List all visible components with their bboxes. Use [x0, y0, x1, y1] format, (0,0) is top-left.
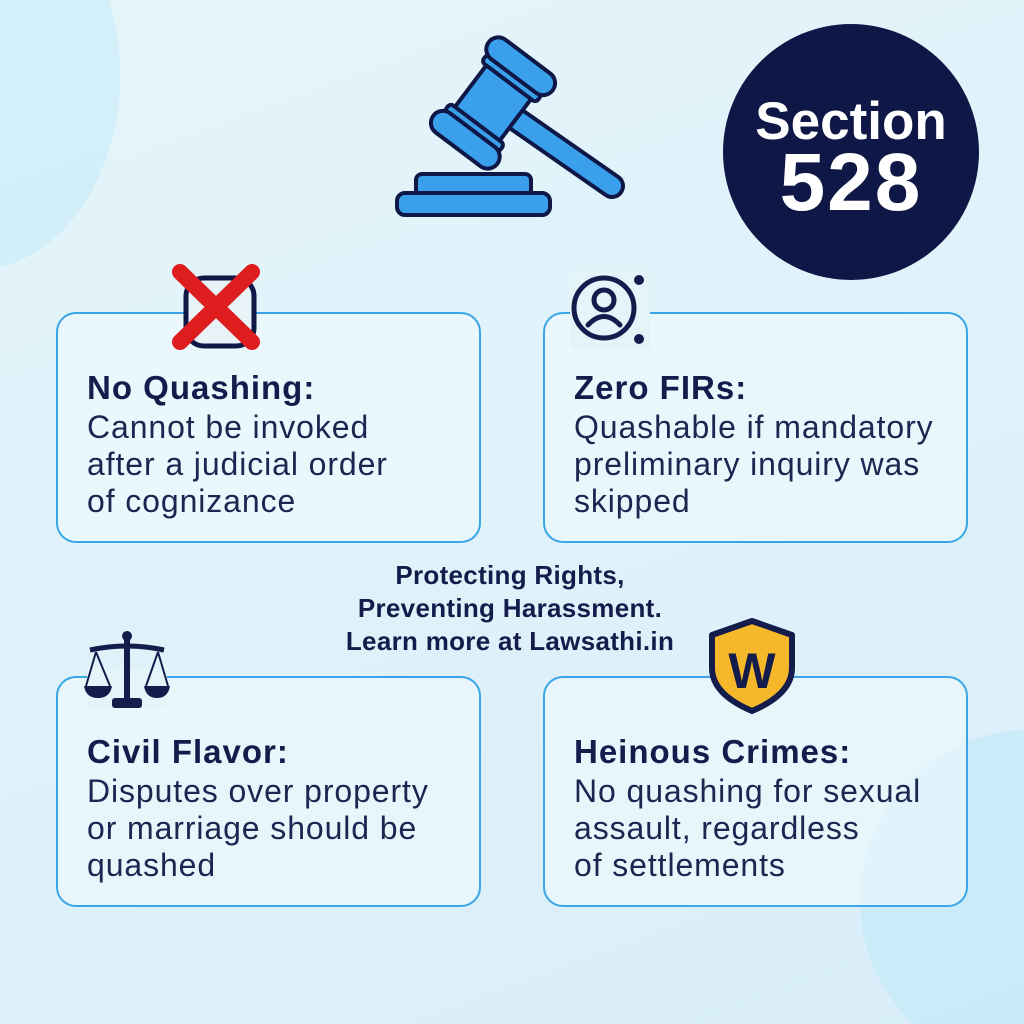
- text: tagline: Protecting Rights,: [395, 560, 625, 590]
- icon: W shield: [709, 618, 795, 714]
- panel: heinous crimes: [543, 676, 968, 907]
- badge: Section 528: Section: [755, 92, 947, 151]
- badge: Section 528: [723, 24, 979, 280]
- text: tagline: Learn more at Lawsathi.in: [346, 626, 674, 656]
- icon: person circle: [570, 275, 650, 344]
- panel: heinous crimes: assault, regardless: [574, 810, 860, 846]
- panel: civil flavor: or marriage should be: [87, 810, 417, 846]
- text: tagline: [346, 560, 674, 656]
- panel: zero firs: [543, 312, 968, 543]
- text: tagline: Preventing Harassment.: [358, 593, 662, 623]
- panel: civil flavor: quashed: [87, 847, 216, 883]
- panel: zero firs: preliminary inquiry was: [574, 446, 920, 482]
- panel: no quashing: after a judicial order: [87, 446, 388, 482]
- panel: no quashing: [56, 312, 481, 543]
- panel: no quashing: of cognizance: [87, 483, 296, 519]
- icon: crossed box: [172, 264, 260, 350]
- panel: civil flavor: [56, 676, 481, 907]
- icon: W shield: W: [728, 643, 776, 699]
- badge: Section 528: 528: [780, 137, 922, 228]
- panel: heinous crimes: of settlements: [574, 847, 786, 883]
- icon: scales: [84, 631, 170, 708]
- panel: heinous crimes: Heinous Crimes:: [574, 733, 851, 770]
- panel: zero firs: Zero FIRs:: [574, 369, 747, 406]
- icon: gavel: [395, 35, 625, 217]
- panel: civil flavor: Disputes over property: [87, 773, 429, 809]
- panel: no quashing: Cannot be invoked: [87, 409, 369, 445]
- panel: zero firs: skipped: [574, 483, 691, 519]
- panel: heinous crimes: No quashing for sexual: [574, 773, 921, 809]
- panel: zero firs: Quashable if mandatory: [574, 409, 934, 445]
- panel: civil flavor: Civil Flavor:: [87, 733, 289, 770]
- panel: no quashing: No Quashing:: [87, 369, 315, 406]
